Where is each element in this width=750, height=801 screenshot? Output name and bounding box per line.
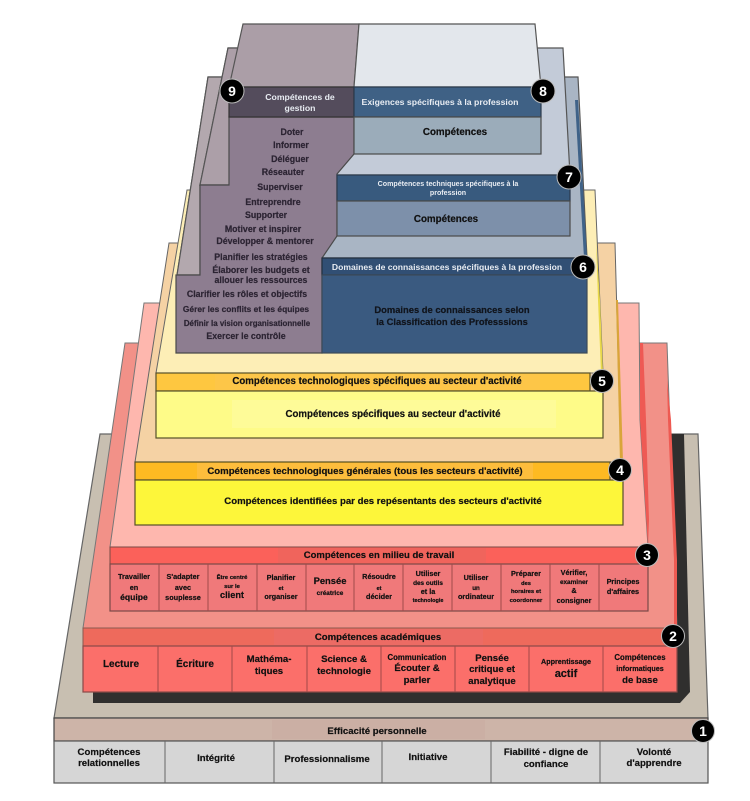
panel: management competencies column: Développer & mentorer [216,236,314,246]
tier 8: occupation-specific requirements: Compétences [423,127,488,138]
tier 3: workplace competencies: organiser [264,592,298,601]
tier 7: occupation-specific technical competencies: Compétences [414,214,479,225]
tier 7: occupation-specific technical competencies: Compétences techniques spécifiques à la [378,180,518,188]
tier 2: academic competencies: actif [555,668,578,680]
tier 9 band: management competencies: Compétences de [265,92,335,102]
tier 1: personal effectiveness: Professionnalisme [284,754,370,765]
tier 3: workplace competencies: Utiliser [464,573,489,582]
top face of the pyramid [229,24,541,87]
number badges: 2 [669,628,677,644]
number badges: 8 [539,83,547,99]
tier 2: academic competencies: de base [622,675,658,686]
panel: management competencies column: Définir la vision organisationnelle [184,319,311,328]
tier 3: workplace competencies: & [571,586,577,595]
number badges: 1 [699,723,707,739]
tier 2: academic competencies: Compétences académiques [315,632,441,643]
panel: management competencies column: Élaborer les budgets et [212,265,310,275]
tier 3: workplace competencies: Pensée [314,575,346,586]
tier 1: personal effectiveness: Fiabilité - digne de [504,747,588,758]
number badges: 5 [598,373,606,389]
tier 3: workplace competencies: coordonner [510,598,543,604]
tier 2: academic competencies: Lecture [103,659,139,670]
tier 3: workplace competencies: avec [175,583,191,592]
tier 3: workplace competencies: Travailler [118,572,150,581]
number badges: 3 [643,547,651,563]
tier 6 back face [177,77,587,275]
tier 8: occupation-specific requirements [354,87,541,154]
tier 3: workplace competencies: des [521,581,531,587]
panel: management competencies column: Réseauter [262,167,305,177]
tier 1: personal effectiveness: d'apprendre [626,758,682,769]
panel: management competencies column: Planifier les stratégies [214,252,308,262]
panel: management competencies column: allouer les ressources [215,275,308,285]
tier 3: workplace competencies: Principes [607,577,639,586]
panel: management competencies column: Exercer le contrôle [206,331,286,341]
tier 3: workplace competencies: Planifier [267,573,296,582]
tier 3: workplace competencies: un [472,585,480,592]
tier 2: academic competencies: Écouter & [394,662,440,674]
tier 7: occupation-specific technical competencies [337,175,570,236]
tier 5: sector-specific competencies: Compétences technologiques spécifiques au secteur d'activité [232,376,522,387]
panel: management competencies column: Doter [281,127,304,137]
tier 6: occupation-specific knowledge: la Classification des Professsions [376,316,528,327]
tier 3: workplace competencies: client [220,590,244,600]
tier 6: occupation-specific knowledge [322,258,587,353]
tier 3: workplace competencies: Être centré [217,573,248,581]
tier 6: occupation-specific knowledge: Domaines de connaissances selon [374,304,530,315]
tier 4: general technology competencies: Compétences identifiées par des repésentants des secteurs d'activité [224,496,542,507]
tier 8: occupation-specific requirements: Exigences spécifiques à la profession [362,97,518,107]
tier 2: academic competencies: Mathéma- [247,654,291,665]
panel: management competencies column [176,117,354,353]
tier 3: workplace competencies: Vérifier, [561,568,587,577]
panel: management competencies column: Informer [273,140,309,150]
tier 2: academic competencies: Communication [388,653,447,662]
number badges: 9 [228,83,236,99]
tier 3: workplace competencies: et [278,586,284,592]
tier 3: workplace competencies: Résoudre [362,572,396,581]
panel: management competencies column: Supporter [245,210,288,220]
tier 2: academic competencies: Compétences [614,653,666,662]
tier 2: academic competencies: analytique [468,676,516,687]
panel: management competencies column: Motiver et inspirer [225,224,302,234]
tier 3: workplace competencies: créatrice [317,590,344,597]
tier 9 band: management competencies: gestion [285,103,315,113]
tier 1: personal effectiveness: confiance [524,759,568,770]
panel: management competencies column: Superviser [257,182,303,192]
tier 1: personal effectiveness: Initiative [409,752,447,763]
tier 2: academic competencies: Écriture [176,657,214,670]
tier 3: workplace competencies: S'adapter [167,572,200,581]
number badges: 6 [579,259,587,275]
tier 3: workplace competencies: souplesse [165,593,201,602]
tier 2: academic competencies: critique et [469,664,516,675]
tier 9 band: management competencies [229,87,354,117]
tier 2: academic competencies: technologie [317,666,371,677]
tier 3: workplace competencies: sur le [224,584,241,590]
tier 2: academic competencies: tiques [255,666,283,677]
tier 3: workplace competencies: des outils [413,580,443,587]
tier 3: workplace competencies: et la [421,587,436,596]
tier 7 back face [200,48,570,185]
tier 1: personal effectiveness: Intégrité [197,753,235,764]
tier 5: sector-specific competencies [156,190,603,438]
tier 3: workplace competencies: examiner [560,579,589,586]
tier 3: workplace competencies: horaires et [511,589,541,595]
panel: management competencies column: Déléguer [271,154,309,164]
panel: management competencies column: Clarifier les rôles et objectifs [187,289,307,299]
tier 1: personal effectiveness: Efficacité personnelle [327,726,427,737]
tier 3: workplace competencies: équipe [120,592,148,602]
tier 6: occupation-specific knowledge: Domaines de connaissances spécifiques à la profession [332,262,562,272]
panel: management competencies column: Entreprendre [245,197,301,207]
number badges: 7 [565,169,573,185]
tier 3: workplace competencies: technologie [413,598,443,604]
tier 5: sector-specific competencies: Compétences spécifiques au secteur d'activité [286,409,501,420]
tier 2: academic competencies: Science & [321,654,367,665]
tier 3: workplace competencies [110,303,649,611]
tier 1: personal effectiveness: Volonté [637,747,671,758]
tier 1: personal effectiveness: Compétences [78,747,140,758]
tier 3: workplace competencies: Compétences en milieu de travail [304,550,454,561]
tier 3: workplace competencies: consigner [557,596,592,605]
tier 2: academic competencies [83,343,677,692]
tier 4: general technology competencies [135,243,623,525]
tier 3: workplace competencies: Préparer [511,569,541,578]
panel: management competencies column: Gérer les conflits et les équipes [183,304,309,314]
number badges [220,79,714,742]
tier 2: academic competencies: Pensée [475,653,509,664]
tier 1: personal effectiveness [54,434,708,783]
tier 2: academic competencies: Apprentissage [541,657,591,666]
tier 2: academic competencies: parler [404,675,431,686]
tier 3: workplace competencies: Utiliser [416,569,441,578]
tier 2: academic competencies: informatiques [616,664,664,673]
tier 7: occupation-specific technical competencies: profession [430,189,466,197]
tier 3: workplace competencies: ordinateur [458,592,494,601]
tier 1: personal effectiveness: relationnelles [78,758,140,769]
tier 4: general technology competencies: Compétences technologiques générales (tous les secteurs d'activité) [207,466,523,477]
tier 3: workplace competencies: d'affaires [607,587,639,596]
number badges: 4 [616,462,624,478]
tier 3: workplace competencies: et [376,586,382,592]
tier 3: workplace competencies: en [130,583,138,592]
tier 3: workplace competencies: décider [366,592,392,601]
